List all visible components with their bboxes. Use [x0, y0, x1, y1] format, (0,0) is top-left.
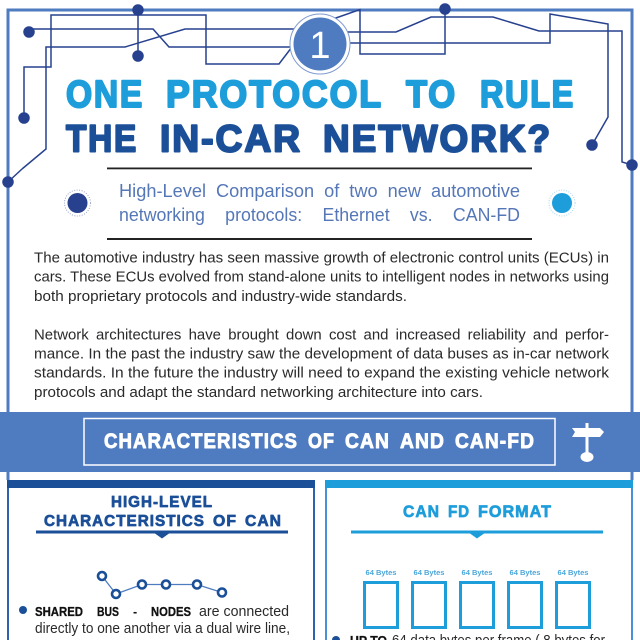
section banner: CAN-FD: [455, 430, 535, 453]
byte labels: [366, 570, 589, 577]
intro paragraph two: Network architectures have brought down cost and increased reliability and perfor-: [34, 328, 609, 344]
panel heading: FORMAT: [478, 503, 552, 521]
heading rule: [351, 530, 603, 538]
panel: high-level characteristics of CAN: [7, 480, 315, 640]
panel heading: [403, 503, 552, 521]
panel heading: CAN: [403, 503, 440, 521]
section banner: CHARACTERISTICS: [104, 430, 298, 453]
bullet: shared bus: directly to one another via a dual wire line,: [35, 621, 290, 637]
intro paragraph one: both proprietary protocols and industry-wide standards.: [34, 289, 407, 305]
number badge: [290, 14, 350, 74]
title: PROTOCOL: [166, 74, 383, 116]
subtitle rules: [107, 168, 532, 240]
page frame: [8, 10, 632, 480]
byte labels: 64 Bytes: [462, 570, 493, 577]
title: TO: [406, 74, 457, 116]
section banner: CAN: [345, 430, 390, 453]
section banner: AND: [400, 430, 445, 453]
intro paragraph one: [34, 251, 609, 305]
byte labels: 64 Bytes: [414, 570, 445, 577]
panel heading: [44, 494, 282, 530]
bullet: shared bus: are connected: [199, 604, 289, 620]
byte labels: 64 Bytes: [366, 570, 397, 577]
bullet: shared bus: BUS: [97, 605, 119, 619]
icon: signpost: [572, 423, 604, 462]
number badge: 1: [309, 25, 331, 67]
bullet: shared bus: -: [133, 605, 137, 619]
title: RULE: [480, 74, 575, 116]
icon: dark dot: [64, 190, 90, 216]
icon: bus nodes: [98, 572, 226, 598]
panel heading: CHARACTERISTICS: [44, 513, 205, 530]
subtitle: High-Level Comparison of two new automotive: [119, 180, 520, 201]
title: IN-CAR: [160, 118, 302, 160]
byte boxes: [364, 582, 590, 628]
title: ONE: [66, 74, 144, 116]
section banner: [0, 412, 640, 472]
circuit lines: [3, 4, 637, 187]
panel heading: CAN: [245, 513, 282, 530]
subtitle: networking protocols: Ethernet vs. CAN-FD: [119, 204, 520, 225]
intro paragraph two: [34, 328, 610, 401]
intro paragraph one: The automotive industry has seen massive growth of electronic control units (ECUs) in: [34, 251, 609, 267]
panel heading: HIGH-LEVEL: [111, 494, 213, 511]
bullet: shared bus: NODES: [151, 605, 191, 619]
intro paragraph one: cars. These ECUs evolved from stand-alone units to intelligent nodes in networks using: [34, 270, 609, 286]
byte labels: 64 Bytes: [558, 570, 589, 577]
panel heading: FD: [448, 503, 470, 521]
panel heading: OF: [213, 513, 237, 530]
intro paragraph two: protocols and adapt the standard networking architecture into cars.: [34, 385, 483, 401]
heading rule: [36, 530, 288, 538]
section banner: OF: [308, 430, 335, 453]
panel: CAN FD format: [325, 480, 633, 640]
intro paragraph two: standards. In the future the industry will need to expand the existing vehicle network: [34, 366, 610, 382]
title: [66, 74, 575, 160]
byte labels: 64 Bytes: [510, 570, 541, 577]
bullet: shared bus: SHARED: [35, 605, 83, 619]
subtitle: [119, 180, 520, 225]
title: NETWORK?: [323, 118, 552, 160]
icon: light dot: [549, 190, 575, 216]
bullet: shared bus: [19, 604, 290, 637]
intro paragraph two: mance. In the past the industry saw the development of data buses as in-car network: [34, 346, 610, 362]
title: THE: [66, 118, 138, 160]
